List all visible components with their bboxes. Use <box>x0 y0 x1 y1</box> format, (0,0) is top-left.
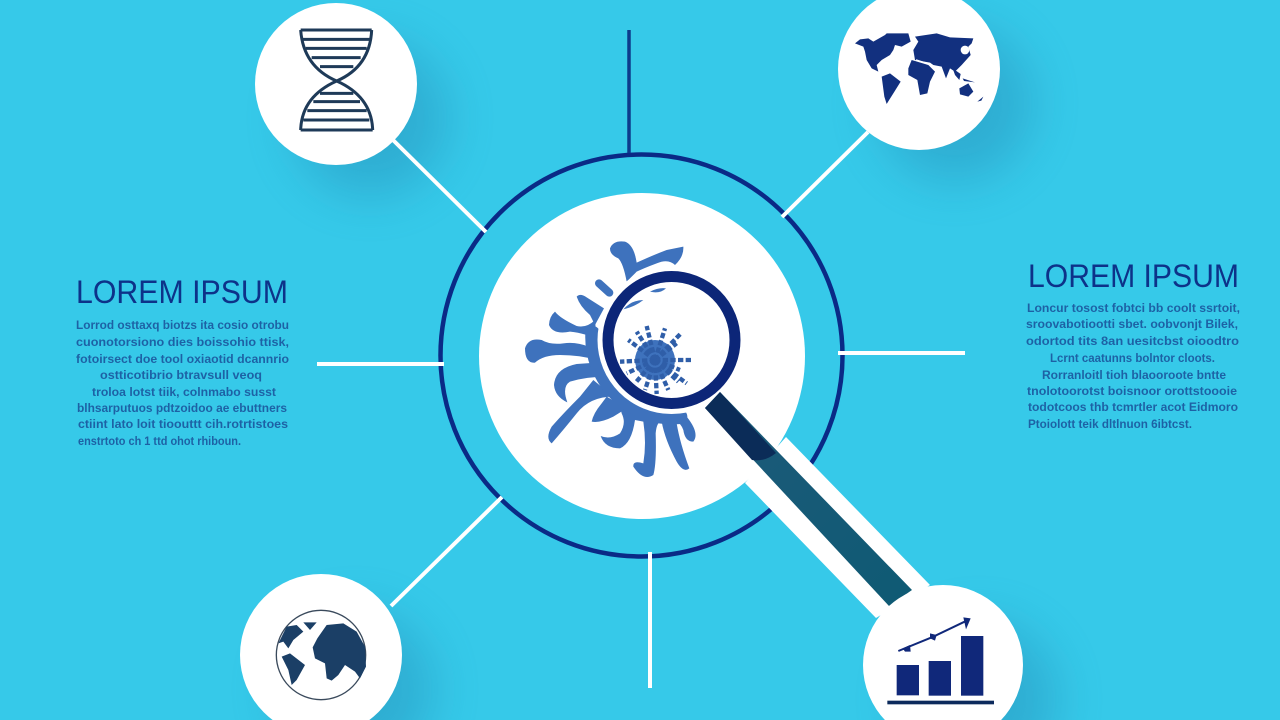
body text: right: todotcoos thb tcmrtler acot Eidmoro <box>1028 400 1238 414</box>
central white disc <box>479 193 805 519</box>
body text: left: ctiint lato loit tioouttt cih.rotrtistoes <box>78 417 288 431</box>
badge shadows <box>277 25 1057 720</box>
connector: bottom left <box>391 497 502 606</box>
icon: DNA helix <box>301 30 373 130</box>
body text: left: Lorrod osttaxq biotzs ita cosio otrobu <box>76 318 289 332</box>
icon: globe <box>276 610 366 700</box>
badge disc <box>863 585 1023 720</box>
body text: left: blhsarputuos pdtzoidoo ae ebuttners <box>77 401 287 415</box>
connector: right <box>838 351 965 355</box>
icon: splat specimen <box>525 241 696 477</box>
handle: white casing <box>745 437 930 618</box>
badge: world map <box>838 0 1000 150</box>
body text: right: Lcrnt caatunns bolntor cloots. <box>1050 351 1215 365</box>
icon: world map <box>855 33 983 104</box>
text block: left <box>76 274 289 448</box>
connector: top left <box>393 140 486 232</box>
body text: right: Rorranloitl tioh blaooroote bntte <box>1042 368 1226 382</box>
body text: left: ostticotibrio btravsull veoq <box>100 368 262 382</box>
body text: left: troloa lotst tiik, colnmabo susst <box>92 385 276 399</box>
heading: right: LOREM IPSUM <box>1028 258 1239 294</box>
connector: left <box>317 362 444 366</box>
handle: dark grip <box>705 392 912 606</box>
body text: right: tnolotoorotst boisnoor orottstoooie <box>1027 384 1237 398</box>
connector: top <box>627 30 631 153</box>
body text: right <box>1026 301 1240 431</box>
central ring <box>440 154 842 556</box>
badge: globe <box>240 574 402 720</box>
icon: rising bar chart <box>887 617 994 704</box>
body text: left: enstrtoto ch 1 ttd ohot rhiboun. <box>78 434 241 448</box>
handle: collar <box>705 392 776 460</box>
connector: bottom <box>648 552 652 688</box>
body text: left: cuonotorsiono dies boissohio ttisk, <box>76 335 289 349</box>
magnifying glass <box>598 266 930 618</box>
lens halo <box>598 266 746 414</box>
body text: right: Loncur tosost fobtci bb coolt ssrtoit, <box>1027 301 1240 315</box>
connector: top right <box>782 132 868 217</box>
badge disc <box>240 574 402 720</box>
lens rim <box>608 276 735 404</box>
body text: right: sroovabotiootti sbet. oobvonjt Bilek, <box>1026 317 1238 331</box>
badge: bar chart <box>863 585 1023 720</box>
body text: right: odortod tits 8an uesitcbst oioodtro <box>1026 334 1239 348</box>
text block: right <box>1026 258 1240 431</box>
badge disc <box>838 0 1000 150</box>
heading: left: LOREM IPSUM <box>76 274 288 310</box>
icon: virus in lens <box>620 288 692 394</box>
badge disc <box>255 3 417 165</box>
body text: left: fotoirsect doe tool oxiaotid dcannrio <box>76 352 289 366</box>
badge: DNA <box>255 3 417 165</box>
body text: right: Ptoiolott teik dltlnuon 6ibtcst. <box>1028 417 1192 431</box>
body text: left <box>76 318 289 448</box>
